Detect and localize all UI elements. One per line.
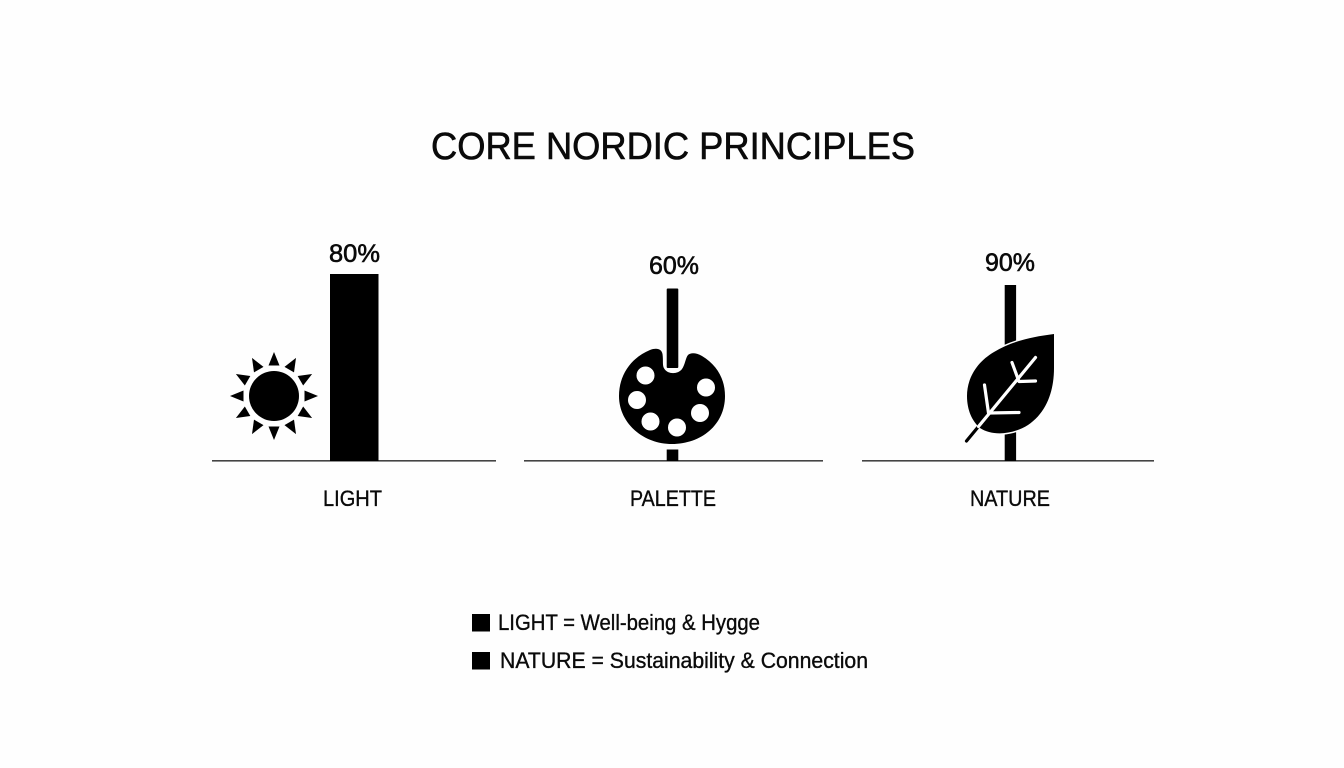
nature baseline [862, 460, 1154, 462]
palette label: PALETTE [630, 486, 716, 511]
panel: nature [862, 249, 1154, 511]
legend item: light: LIGHT = Well-being & Hygge [498, 610, 760, 635]
legend [472, 610, 868, 673]
palette value: 60% [649, 252, 699, 280]
panel: light [212, 240, 496, 511]
palette baseline [524, 460, 823, 462]
panel: palette [524, 252, 823, 511]
nature value: 90% [985, 249, 1035, 277]
icon: sun [230, 352, 318, 440]
light bar [330, 274, 378, 461]
title: CORE NORDIC PRINCIPLES [431, 126, 915, 168]
light baseline [212, 460, 496, 462]
icon: palette [619, 349, 725, 444]
nature label: NATURE [970, 486, 1050, 511]
palette bar [667, 288, 678, 461]
light label: LIGHT [323, 486, 382, 511]
icon: leaf [966, 334, 1054, 441]
legend item: nature: NATURE = Sustainability & Connection [500, 648, 868, 673]
nature bar [1005, 285, 1016, 461]
light value: 80% [329, 240, 380, 268]
